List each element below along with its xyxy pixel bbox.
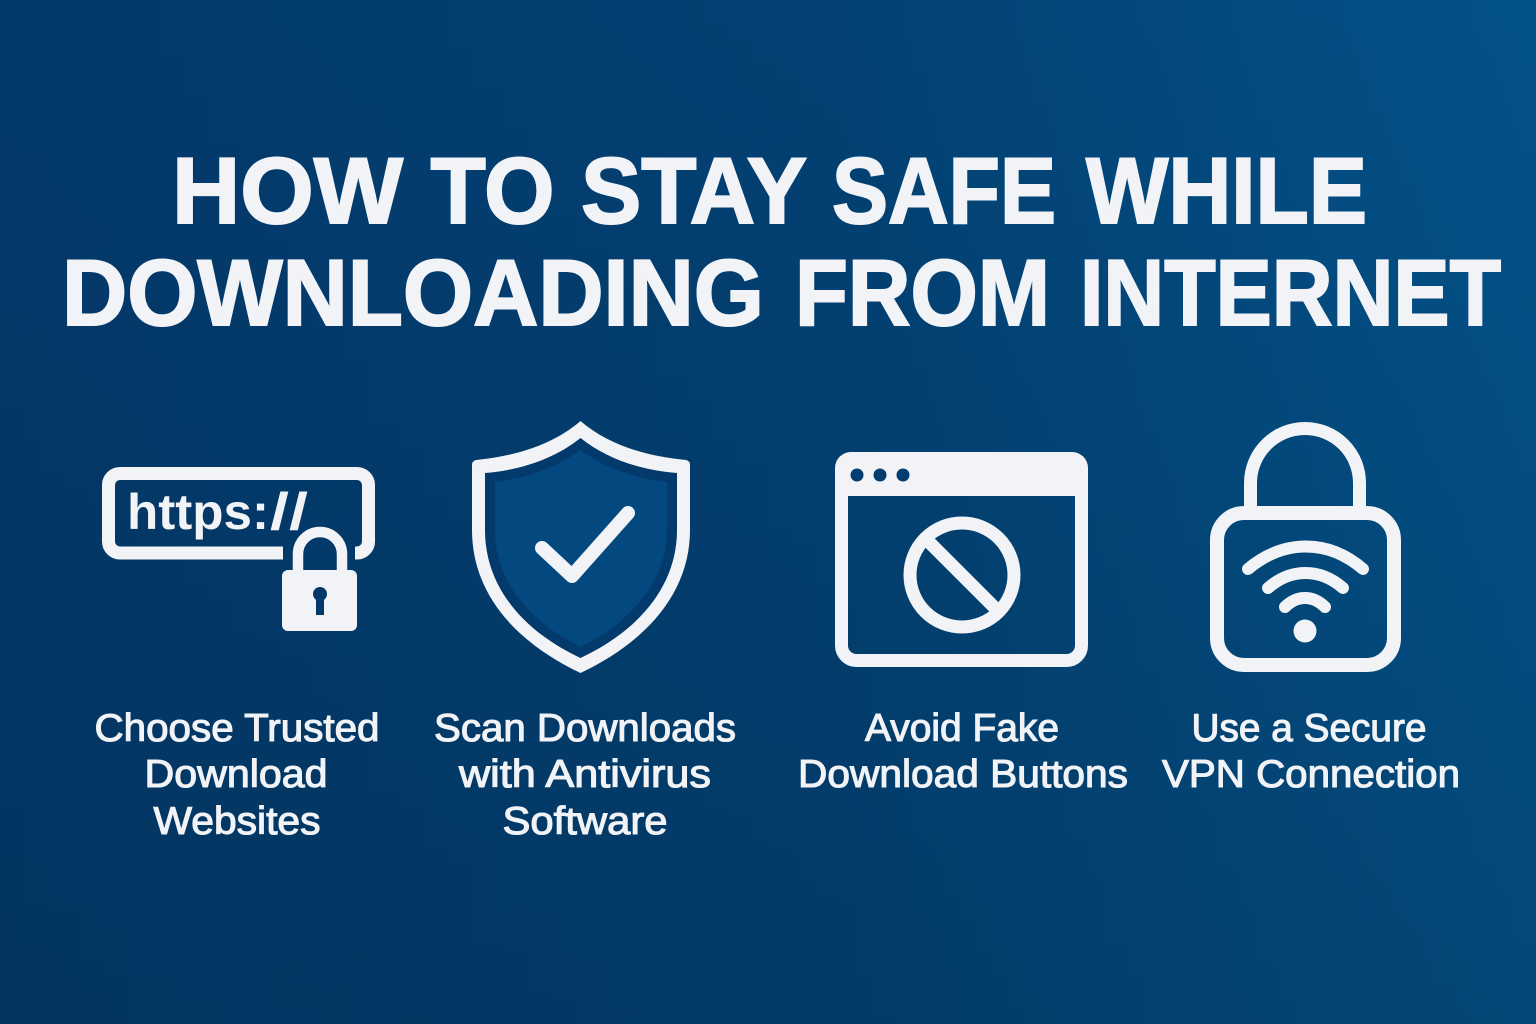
caption: use a secure vpn connection: Use a Secure: [1192, 707, 1426, 750]
title: STAY: [581, 138, 807, 243]
title: HOW: [172, 138, 403, 243]
title: DOWNLOADING: [62, 240, 764, 345]
caption: choose trusted download websites: [94, 707, 380, 843]
caption: avoid fake download buttons: Download Buttons: [798, 753, 1128, 796]
icon: browser window with blocked symbol: [835, 452, 1088, 660]
caption: scan downloads with antivirus software: Software: [502, 800, 668, 843]
title: TO: [430, 138, 554, 243]
icon: https address bar with padlock: [108, 474, 368, 631]
caption: use a secure vpn connection: [1162, 707, 1460, 796]
caption: scan downloads with antivirus software: Scan Downloads: [434, 707, 736, 750]
title: WHILE: [1086, 138, 1367, 243]
caption: scan downloads with antivirus software: with Antivirus: [458, 753, 711, 796]
caption: choose trusted download websites: Choose Trusted: [94, 707, 380, 750]
icon: https address bar with padlock: //: [270, 483, 308, 541]
caption: choose trusted download websites: Download: [144, 753, 328, 796]
title: INTERNET: [1080, 240, 1501, 345]
icon: https address bar with padlock: https:: [127, 484, 269, 540]
title: [62, 138, 1501, 345]
title: FROM: [795, 240, 1050, 345]
caption: choose trusted download websites: Websites: [154, 800, 320, 843]
caption: scan downloads with antivirus software: [434, 707, 736, 843]
icon: shield with check mark: [472, 421, 690, 673]
caption: use a secure vpn connection: VPN Connection: [1162, 753, 1460, 796]
caption: avoid fake download buttons: [798, 707, 1128, 796]
title: SAFE: [832, 138, 1056, 243]
caption: avoid fake download buttons: Avoid Fake: [865, 707, 1059, 750]
icon: padlock with wifi symbol: [1217, 428, 1394, 665]
